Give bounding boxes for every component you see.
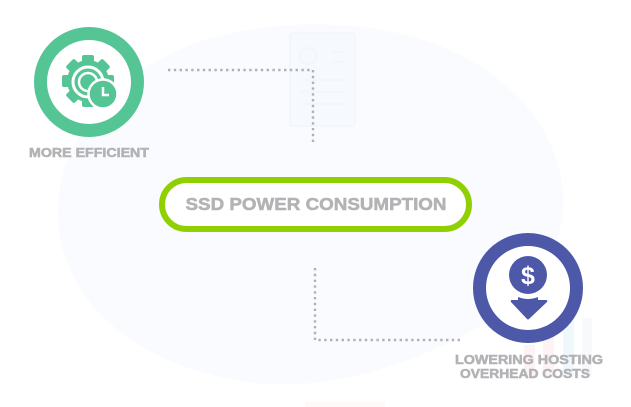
dotted connector: bottom (315, 268, 462, 340)
faded bar chart illustration (524, 318, 592, 377)
icon: gear with clock (62, 55, 118, 108)
pill title: SSD POWER CONSUMPTION (186, 194, 446, 214)
background blob (58, 24, 563, 384)
label: lowering hosting overhead costs (455, 352, 603, 381)
icon badge: more efficient (40, 34, 138, 130)
central pill (162, 180, 469, 229)
label: lowering hosting overhead costs: LOWERING HOSTING (455, 352, 603, 367)
label: more efficient: MORE EFFICIENT (29, 146, 149, 160)
icon: dollar coin with down arrow: $ (521, 262, 535, 290)
faded bottom decoration (305, 402, 385, 407)
icon badge: lowering costs (480, 240, 576, 336)
label: lowering hosting overhead costs: OVERHEAD COSTS (460, 366, 590, 381)
faded document illustration (290, 33, 355, 126)
dotted connector: top (168, 70, 313, 142)
